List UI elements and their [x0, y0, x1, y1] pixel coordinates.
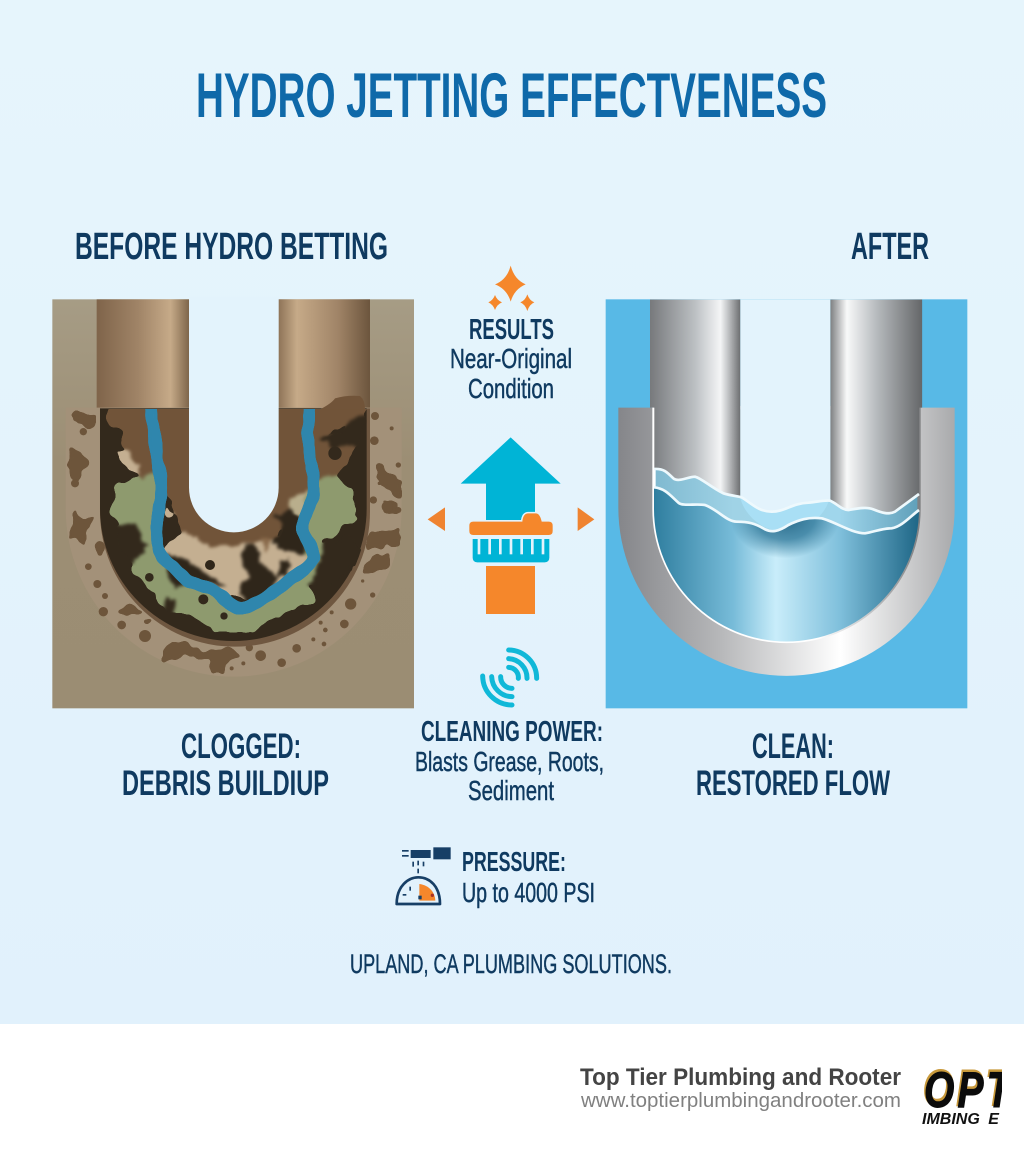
arrow left: [428, 507, 445, 531]
white inner edge: [652, 408, 654, 468]
company url: www.toptierplumbingandrooter.com: [580, 1090, 901, 1112]
nozzle stem: [486, 566, 535, 614]
open centre of the U: [189, 297, 279, 532]
company name: Top Tier Plumbing and Rooter: [580, 1064, 901, 1091]
icon: sparkles: [488, 266, 534, 311]
icon: cleaning waves: [483, 650, 537, 705]
dark clumps: [236, 543, 278, 602]
left pipe: [650, 300, 740, 496]
tan deposit: [165, 532, 310, 600]
caption: clean: RESTORED FLOW: [696, 764, 890, 803]
caption: clean: CLEAN:: [752, 727, 834, 766]
logo: OPT: [923, 1059, 1013, 1116]
text: results: Condition: [468, 373, 554, 404]
text: pressure: PRESSURE:: [462, 846, 566, 877]
arrow right: [578, 507, 594, 531]
outer pipe wall with debris: [66, 408, 402, 677]
water: [654, 487, 919, 641]
logo: IMBING E: [922, 1111, 1000, 1128]
logo: OPT: [924, 1061, 1014, 1118]
text: results: [450, 314, 572, 404]
text: results: RESULTS: [469, 314, 554, 346]
text: cleaning power: CLEANING POWER:: [421, 716, 603, 748]
upper water line: [654, 469, 919, 513]
logo: [922, 1069, 1002, 1124]
shadow under the bend: [734, 519, 836, 557]
text: results: Near-Original: [450, 343, 572, 374]
nozzle comb: [473, 539, 549, 562]
nozzle cap: [469, 513, 553, 535]
deposit overlapping the right pipe: [320, 396, 365, 409]
caption: clogged: [122, 727, 329, 803]
left pipe: [97, 299, 189, 409]
outer pipe wall: [618, 408, 955, 676]
arrow up: [461, 437, 561, 520]
icon: nozzle with upward arrow: [428, 437, 594, 614]
trickle of water through the clog: [150, 403, 314, 608]
text: cleaning power: [415, 716, 604, 806]
text: pressure: Up to 4000 PSI: [462, 877, 595, 908]
lower water line: [654, 487, 919, 533]
heading: before: BEFORE HYDRO BETTING: [75, 226, 388, 268]
caption: clogged: CLOGGED:: [181, 727, 301, 766]
heading: after: AFTER: [851, 226, 929, 268]
caption: clogged: DEBRIS BUILDIUP: [122, 764, 329, 803]
right pipe: [830, 299, 922, 533]
green deposit: [110, 472, 357, 632]
right pipe: [279, 299, 370, 409]
text: cleaning power: Blasts Grease, Roots,: [415, 746, 604, 777]
footer band: [0, 1024, 1024, 1154]
tagline: UPLAND, CA PLUMBING SOLUTIONS.: [350, 949, 672, 979]
panel: clogged pipe illustration: [52, 297, 414, 708]
lens of lighter water: [738, 438, 832, 532]
caption: clean: [696, 727, 890, 803]
rim of clogged inner pipe: [100, 408, 370, 647]
panel: clean pipe illustration: [606, 299, 967, 708]
icon: pressure gauge: [397, 847, 451, 904]
water band: [654, 408, 919, 641]
brown deposit: [108, 403, 370, 557]
open centre of the U: [740, 299, 830, 533]
text: pressure: [462, 846, 595, 908]
dark sludge: [100, 408, 367, 641]
pipes above the water line: [650, 299, 922, 533]
text: cleaning power: Sediment: [468, 775, 554, 806]
